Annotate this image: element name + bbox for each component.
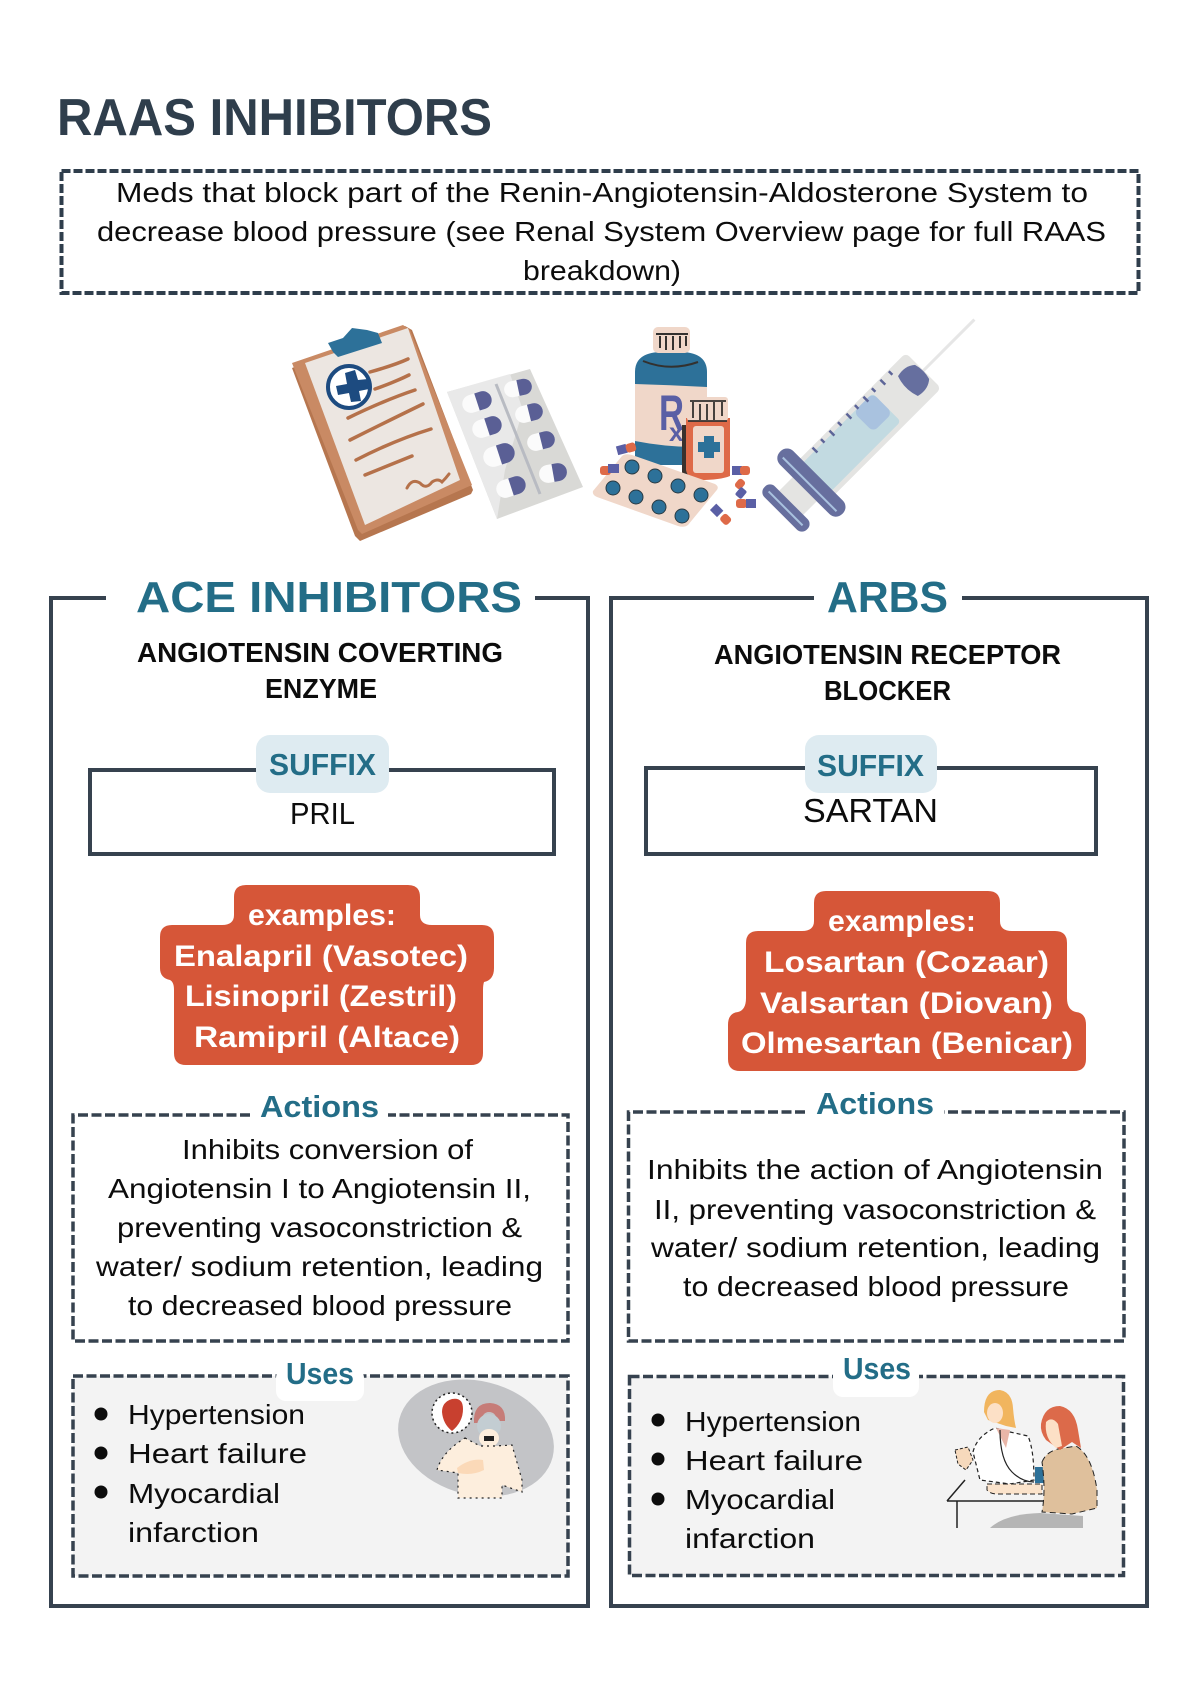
panel frame <box>611 598 1147 1606</box>
panel: ACE inhibitors <box>51 573 588 1606</box>
subtitle: angiotensin converting enzyme <box>137 637 503 704</box>
uses box <box>630 1351 1124 1576</box>
actions box: to decreased blood pressure <box>683 1271 1069 1302</box>
examples callout <box>728 891 1086 1071</box>
actions box: II, preventing vasoconstriction & <box>654 1194 1096 1225</box>
actions box: Inhibits conversion of <box>182 1134 473 1165</box>
actions box: Actions <box>260 1089 379 1124</box>
uses list <box>652 1406 863 1554</box>
intro definition box: Meds that block part of the Renin-Angiotensin-Aldosterone System to <box>116 177 1088 208</box>
uses list: Myocardial <box>685 1484 835 1515</box>
heading: ACE inhibitors: ACE INHIBITORS <box>136 573 522 622</box>
uses list: Hypertension <box>685 1406 861 1437</box>
subtitle: angiotensin receptor blocker: BLOCKER <box>824 675 951 706</box>
suffix box: SARTAN <box>803 792 938 829</box>
panel frame <box>51 598 588 1606</box>
examples callout: examples: <box>248 899 396 932</box>
actions box: Inhibits the action of Angiotensin <box>647 1154 1103 1185</box>
actions box: water/ sodium retention, leading <box>95 1251 543 1282</box>
intro definition box: decrease blood pressure (see Renal System Overview page for full RAAS <box>97 216 1106 247</box>
subtitle: angiotensin converting enzyme: ENZYME <box>265 673 377 704</box>
icon: Rx bottles and tablets: R <box>659 385 684 441</box>
icon: Rx bottles and tablets: x <box>669 417 684 447</box>
uses list: Heart failure <box>685 1445 863 1476</box>
examples callout: Olmesartan (Benicar) <box>741 1027 1073 1060</box>
actions box <box>628 1086 1124 1341</box>
intro definition box: breakdown) <box>523 255 681 286</box>
actions box: to decreased blood pressure <box>128 1290 512 1321</box>
actions box: Angiotensin I to Angiotensin II, <box>108 1173 531 1204</box>
icon: blister pack <box>447 369 583 519</box>
subtitle: angiotensin receptor blocker: ANGIOTENSIN RECEPTOR <box>714 639 1061 670</box>
actions box: water/ sodium retention, leading <box>650 1232 1100 1263</box>
subtitle: angiotensin converting enzyme: ANGIOTENSIN COVERTING <box>137 637 503 668</box>
suffix box: PRIL <box>290 796 355 831</box>
examples callout: Lisinopril (Zestril) <box>185 980 457 1013</box>
icon: patient with chest pain <box>386 1364 566 1512</box>
title: RAAS INHIBITORS <box>57 89 492 147</box>
examples callout: Valsartan (Diovan) <box>760 987 1053 1020</box>
uses list <box>94 1399 307 1548</box>
suffix box <box>646 735 1096 854</box>
suffix box: SUFFIX <box>269 747 376 782</box>
subtitle: angiotensin receptor blocker <box>714 639 1061 706</box>
examples callout: Enalapril (Vasotec) <box>174 940 468 973</box>
panel: ARBs <box>611 573 1147 1606</box>
icon: clipboard <box>292 325 473 541</box>
uses list: infarction <box>128 1517 259 1548</box>
uses list: infarction <box>685 1523 815 1554</box>
icon: Rx bottles and tablets <box>593 327 756 527</box>
suffix box <box>90 735 554 854</box>
illustration: medical supplies row <box>292 288 1006 544</box>
uses list: Hypertension <box>128 1399 305 1430</box>
icon: doctor checking blood pressure <box>947 1390 1097 1528</box>
uses box: Uses <box>843 1351 911 1386</box>
examples callout: examples: <box>828 905 976 938</box>
examples callout: Losartan (Cozaar) <box>764 946 1049 979</box>
uses list: Myocardial <box>128 1478 280 1509</box>
actions box <box>73 1089 568 1341</box>
uses box: Uses <box>286 1356 354 1391</box>
examples callout <box>160 885 494 1065</box>
actions box: Actions <box>816 1086 934 1121</box>
heading: ARBs: ARBS <box>827 573 948 622</box>
uses list: Heart failure <box>128 1438 307 1469</box>
examples callout: Ramipril (Altace) <box>194 1021 460 1054</box>
icon: syringe <box>750 288 1006 544</box>
suffix box: SUFFIX <box>817 748 924 783</box>
actions box: preventing vasoconstriction & <box>117 1212 522 1243</box>
intro definition box <box>62 171 1138 293</box>
uses box <box>73 1356 568 1576</box>
